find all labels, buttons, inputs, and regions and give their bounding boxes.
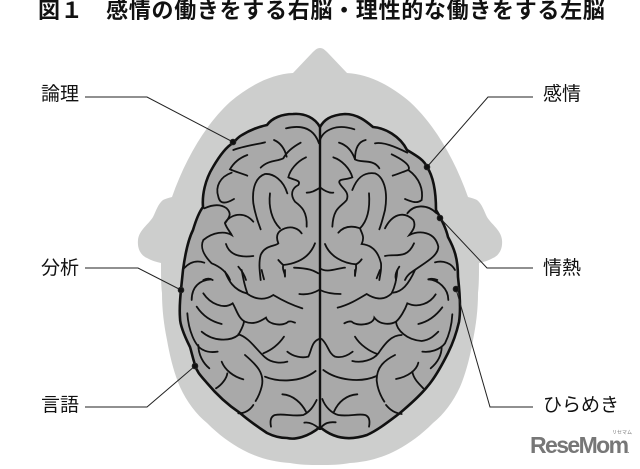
brain folds: upper left bbox=[184, 127, 319, 280]
connector: 言語 bbox=[85, 363, 198, 407]
connector: 感情 bbox=[424, 97, 533, 170]
brain folds: lower left bbox=[187, 270, 319, 428]
midline fissure bbox=[319, 127, 321, 430]
logo: ReseMom watermark: ReseMom. bbox=[530, 432, 629, 458]
connector: 分析 bbox=[85, 268, 184, 293]
brain outline bbox=[180, 114, 460, 439]
label: 感情: 感情 bbox=[543, 84, 581, 105]
text: リセマム bbox=[612, 430, 632, 436]
connector: ひらめき bbox=[453, 286, 533, 407]
connector: 情熱 bbox=[437, 215, 533, 268]
label: 言語: 言語 bbox=[41, 395, 79, 416]
label: ひらめき: ひらめき bbox=[543, 395, 619, 416]
brain folds: upper right bbox=[320, 127, 455, 280]
label: 情熱: 情熱 bbox=[543, 258, 581, 279]
head silhouette bbox=[138, 48, 502, 465]
label: 論理: 論理 bbox=[41, 84, 79, 105]
label: 分析: 分析 bbox=[41, 258, 79, 279]
connector: 論理 bbox=[85, 97, 236, 145]
brain folds: lower right bbox=[320, 270, 452, 427]
